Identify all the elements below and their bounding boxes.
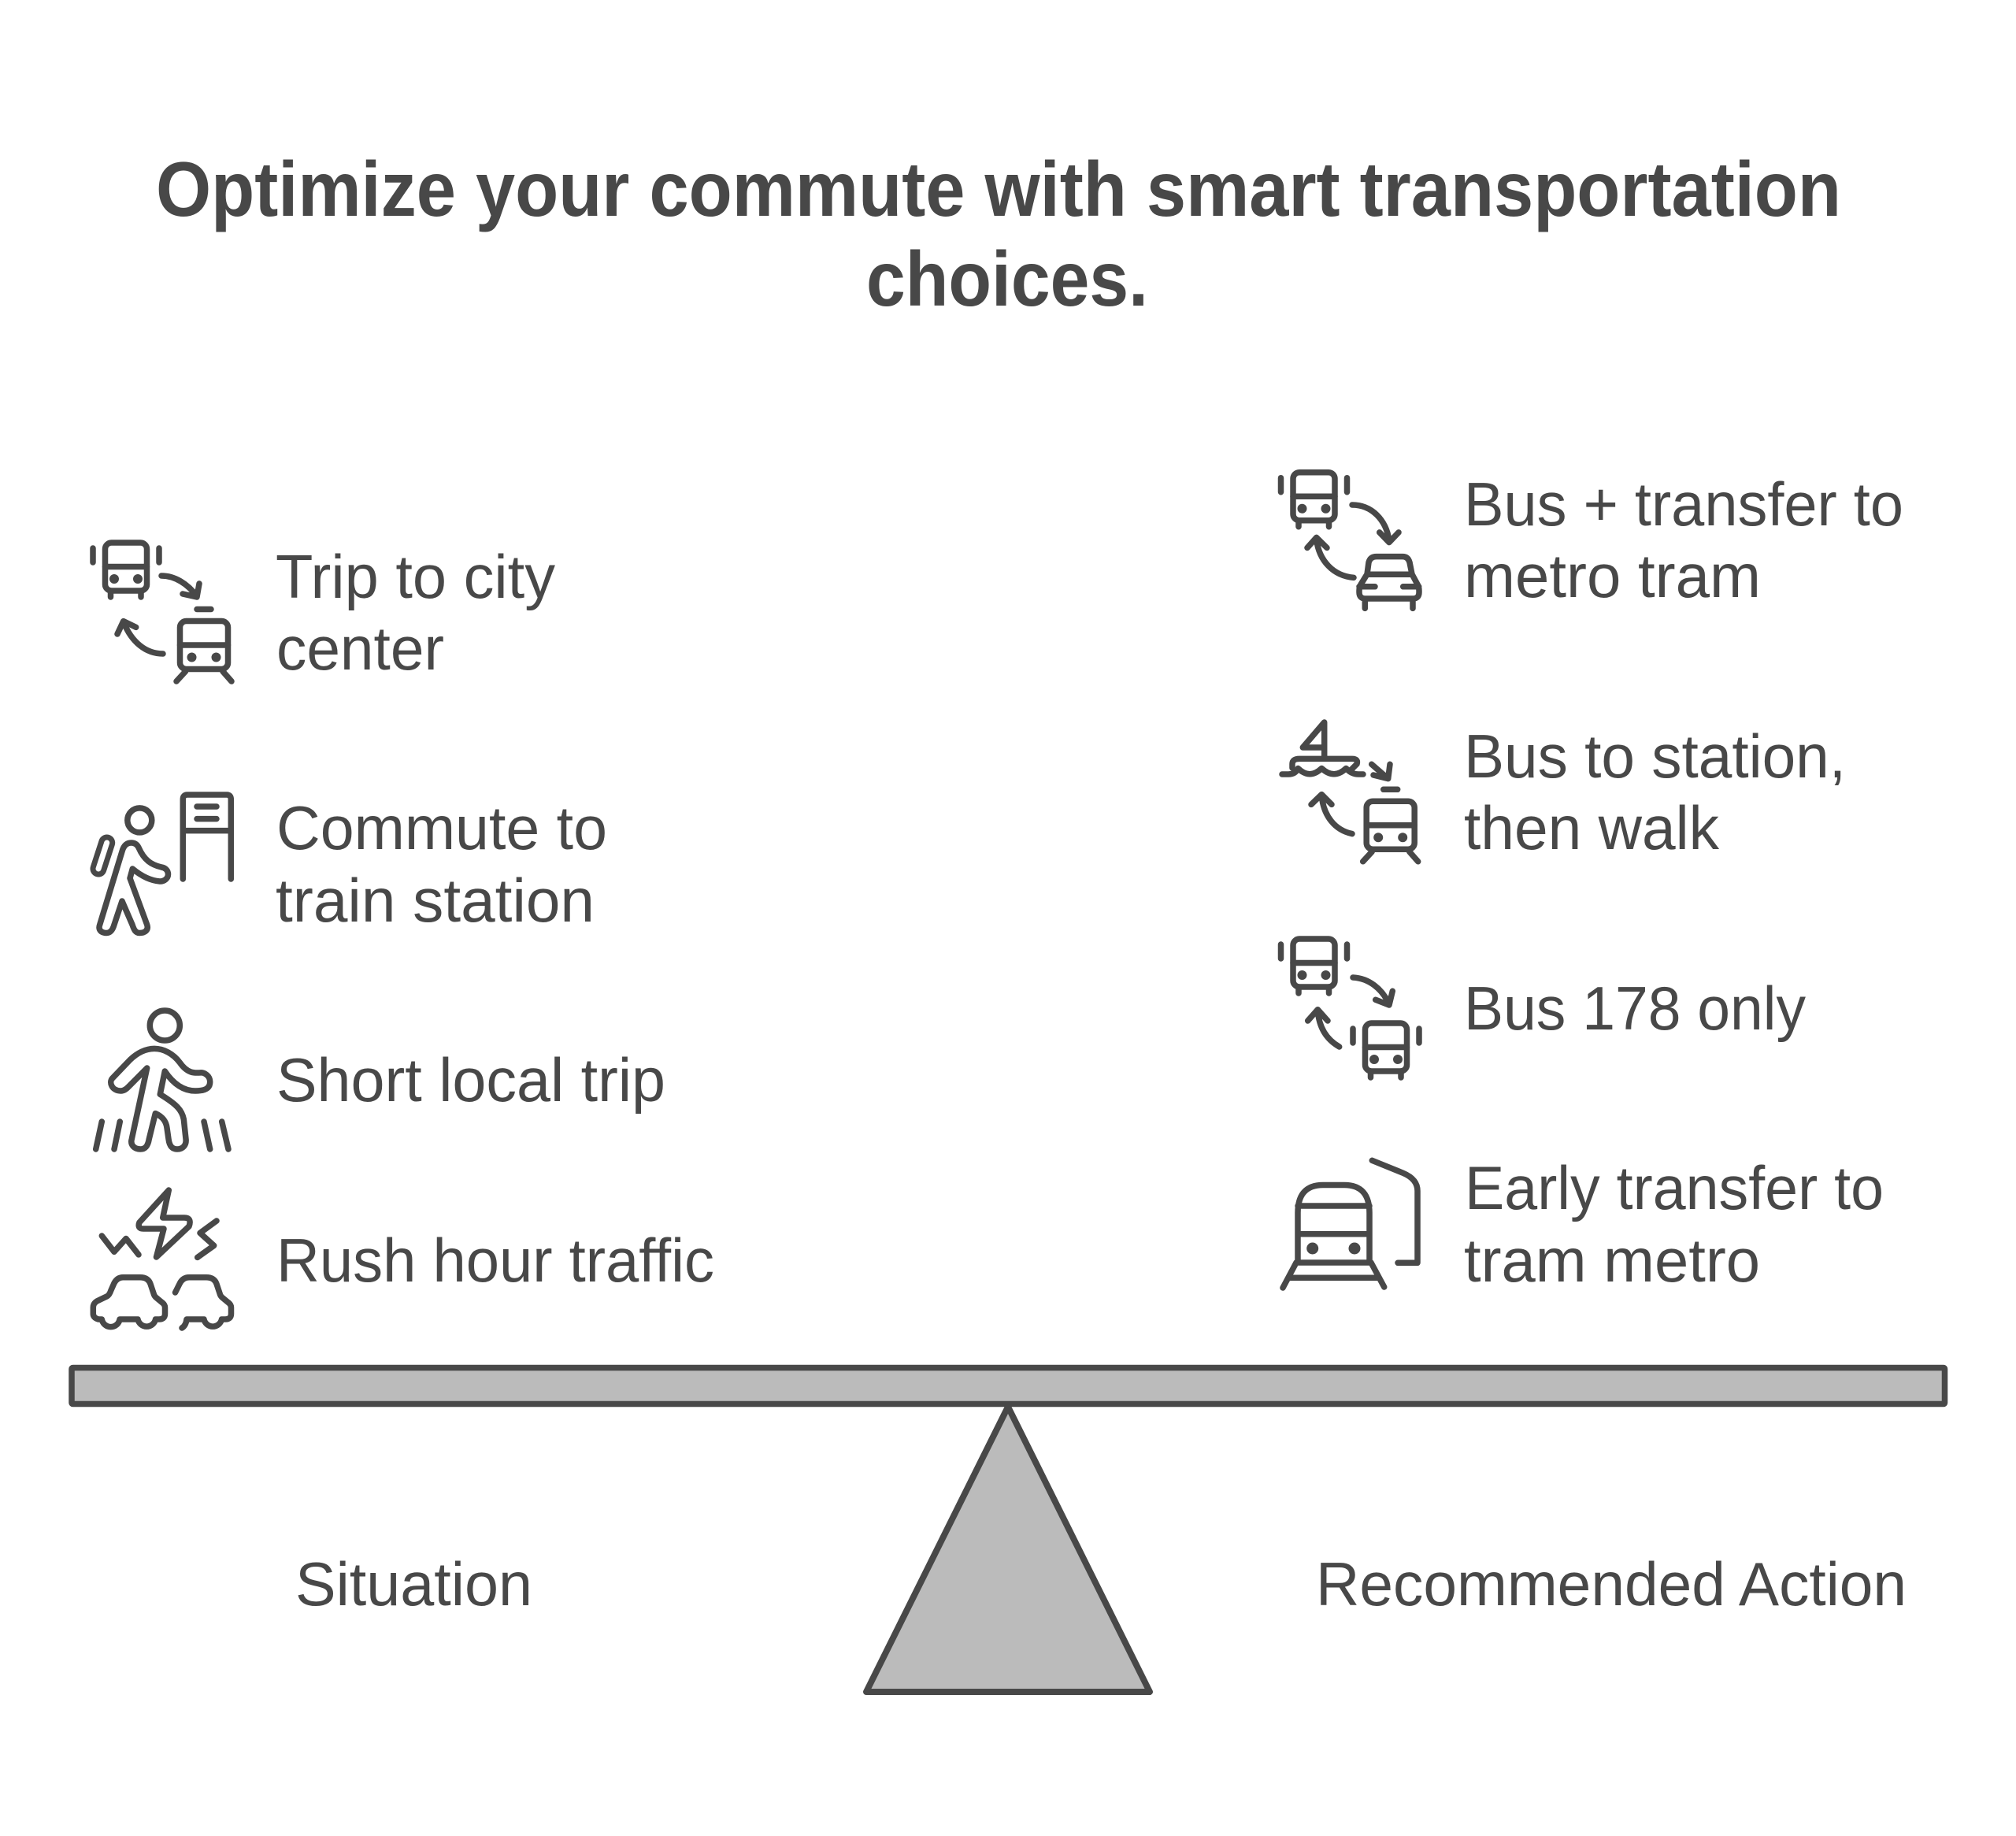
label: recommended action: Recommended Action	[1316, 1549, 1907, 1619]
icon: train with transfer bracket	[1283, 1160, 1418, 1288]
text: bus to station then walk	[1464, 721, 1846, 862]
text: bus plus transfer to metro tram	[1464, 469, 1903, 610]
text: bus to station then walk: Bus to station,	[1464, 721, 1846, 791]
icon: bus and tram exchange	[93, 543, 232, 681]
title: Optimize your commute with smart transportation	[156, 146, 1841, 232]
label: situation: Situation	[295, 1549, 532, 1619]
icon: lightning over cars in traffic	[93, 1190, 232, 1328]
text: commute to train station	[276, 793, 607, 935]
icon: boat and tram exchange	[1282, 722, 1418, 862]
text: trip to city center: center	[276, 614, 444, 683]
text: trip to city center	[276, 542, 555, 683]
text: early transfer to tram metro	[1464, 1153, 1884, 1295]
text: short local trip: Short local trip	[276, 1045, 665, 1115]
text: bus plus transfer to metro tram: Bus + transfer to	[1464, 469, 1903, 539]
text: commute to train station: train station	[276, 866, 595, 935]
title: choices.	[866, 236, 1148, 322]
text: trip to city center: Trip to city	[276, 542, 555, 611]
icon: bus and car exchange	[1280, 473, 1419, 608]
icon: walker with station sign	[98, 795, 231, 933]
icon: bus to bus exchange	[1280, 939, 1419, 1077]
text: commute to train station: Commute to	[276, 793, 607, 862]
text: bus to station then walk: then walk	[1464, 793, 1720, 862]
icon: pedestrian on a short trip	[96, 1011, 228, 1149]
text: bus plus transfer to metro tram: metro tram	[1464, 541, 1761, 610]
text: bus 178 only: Bus 178 only	[1464, 974, 1806, 1043]
title	[156, 146, 1841, 322]
balance beam	[72, 1367, 1945, 1404]
text: early transfer to tram metro: Early transfer to	[1465, 1153, 1884, 1222]
text: rush hour traffic: Rush hour traffic	[276, 1226, 714, 1295]
text: early transfer to tram metro: tram metro	[1464, 1226, 1760, 1295]
balance fulcrum	[866, 1407, 1150, 1692]
